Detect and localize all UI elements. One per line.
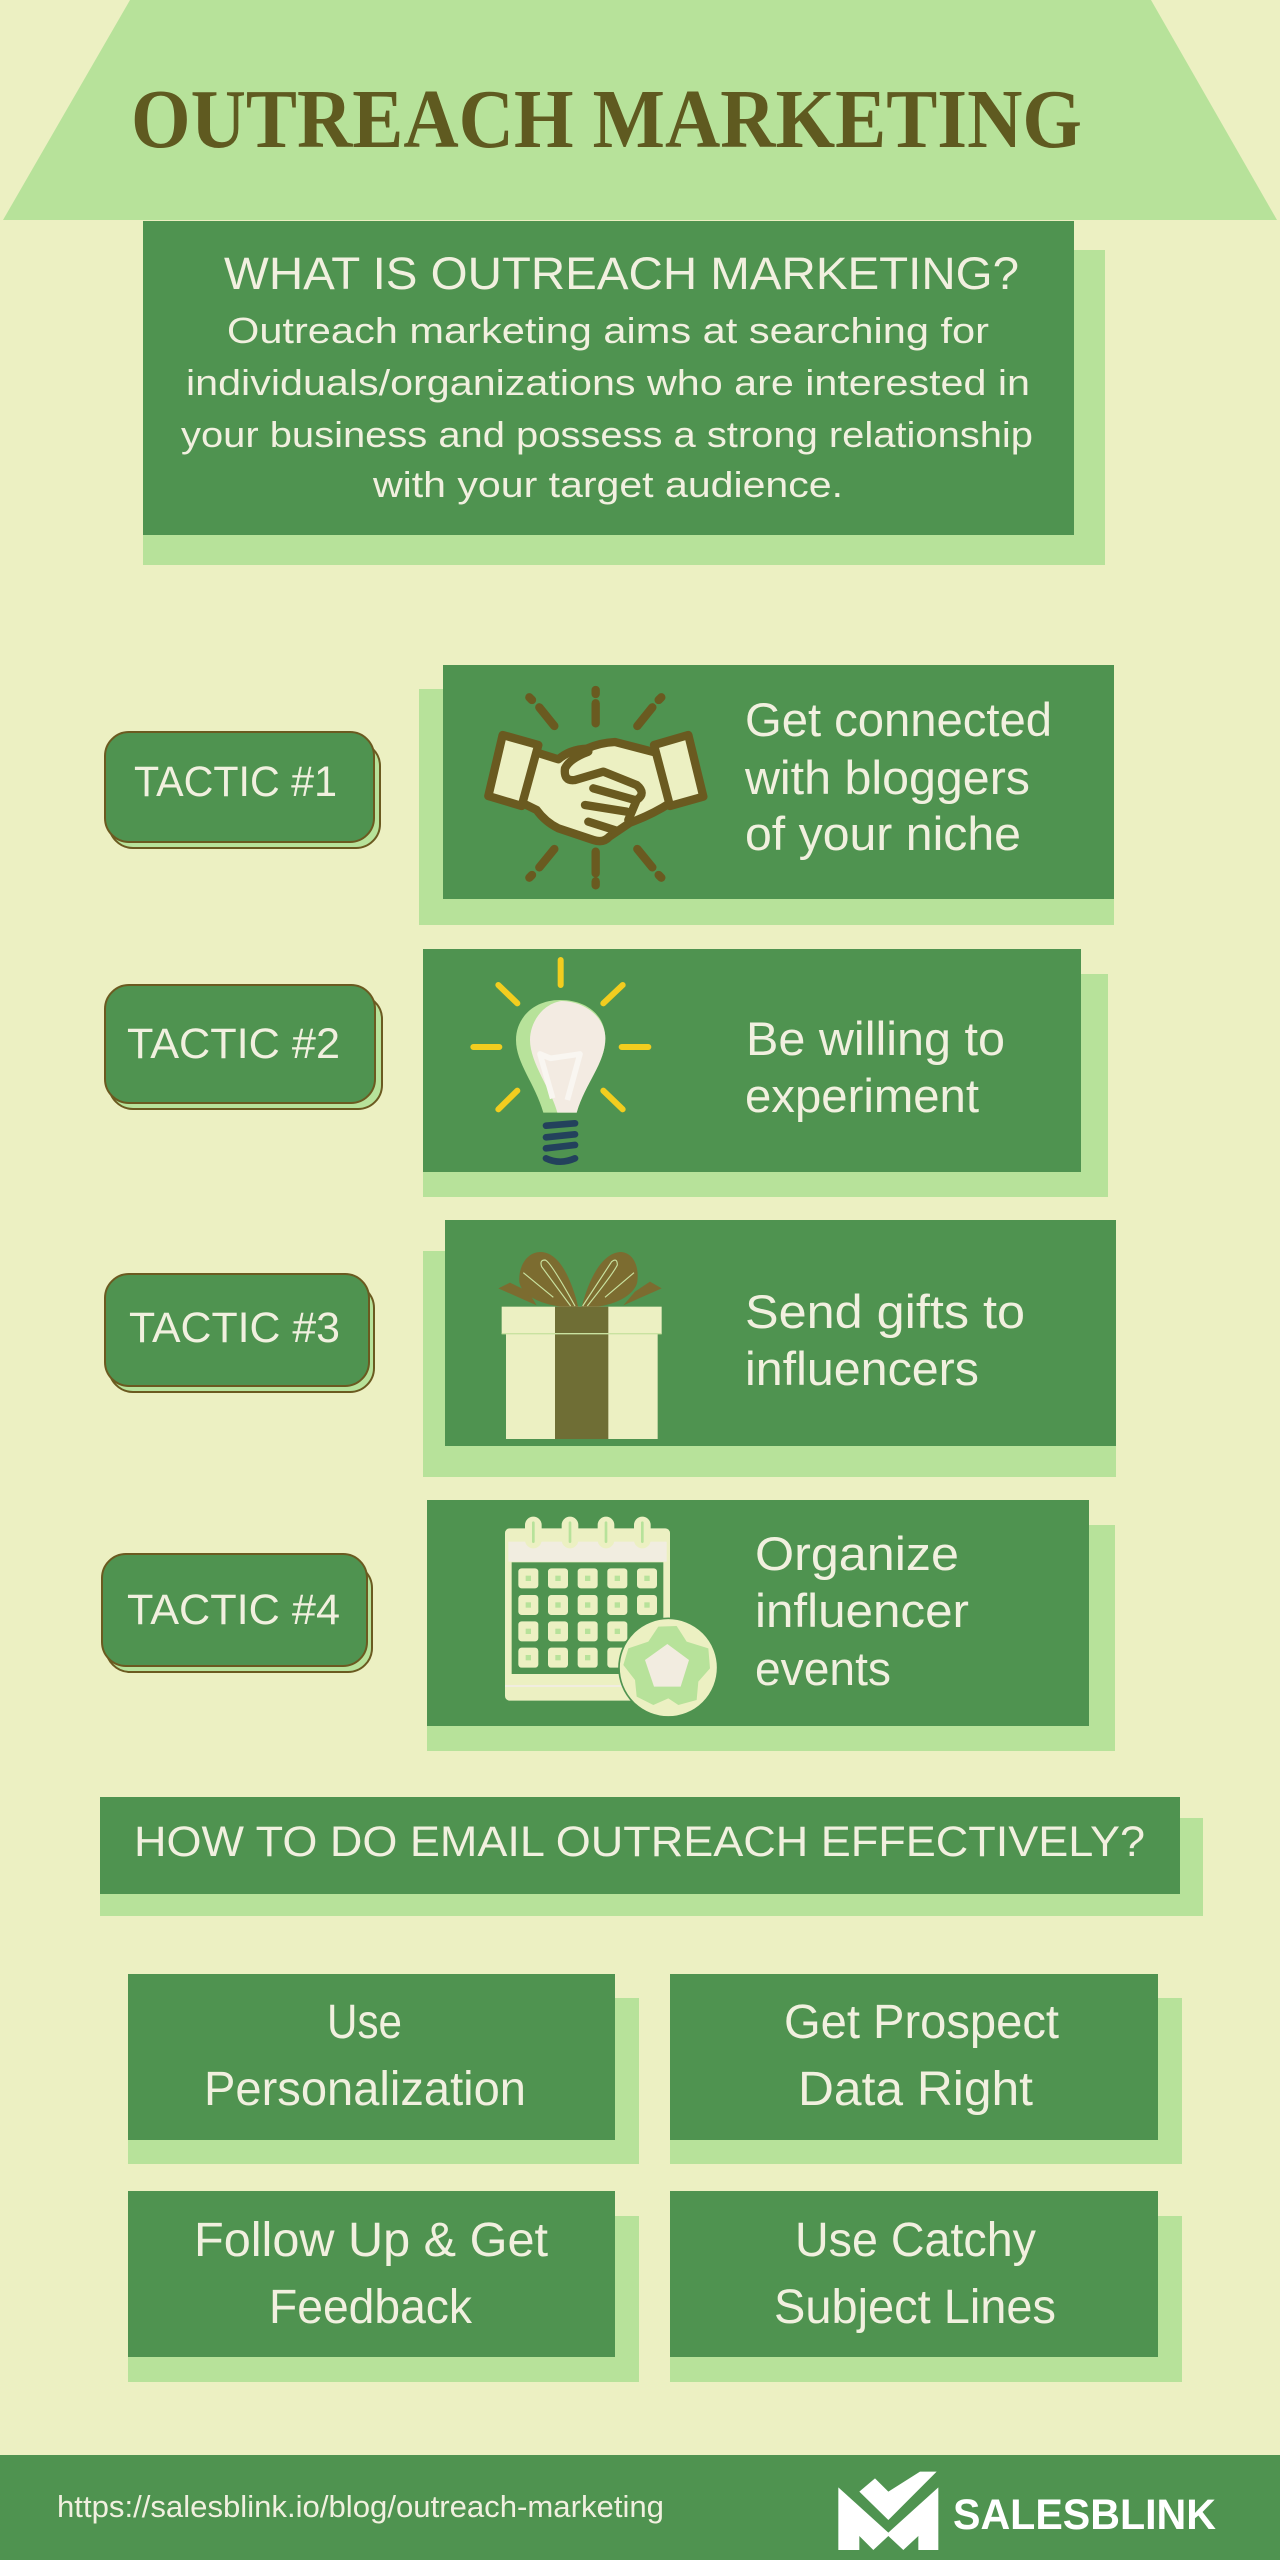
heading: what is outreach marketing: WHAT IS OUTREACH MARKETING? xyxy=(224,248,1019,299)
tactic 2 text xyxy=(745,1012,1005,1122)
card: get prospect data right: Get Prospect xyxy=(784,1996,1059,2049)
tactic 4 text: influencer xyxy=(755,1584,969,1637)
button: tactic 2 xyxy=(105,985,382,1109)
definition text: Outreach marketing aims at searching for xyxy=(227,310,989,351)
button: tactic 1 xyxy=(105,732,380,848)
icon: handshake xyxy=(488,690,703,885)
panel: email outreach heading: HOW TO DO EMAIL OUTREACH EFFECTIVELY? xyxy=(134,1818,1145,1866)
tactic 2 text: experiment xyxy=(745,1069,979,1122)
card: use catchy subject lines xyxy=(670,2191,1182,2382)
button: tactic 2: TACTIC #2 xyxy=(127,1020,340,1068)
icon: calendar and ball xyxy=(505,1517,718,1717)
tactic 1 text: Get connected xyxy=(745,693,1052,746)
panel: tactic 3 xyxy=(423,1220,1116,1477)
card: get prospect data right xyxy=(670,1974,1182,2164)
title banner xyxy=(3,0,1277,220)
definition text xyxy=(181,310,1033,505)
icon: gift box xyxy=(498,1252,662,1439)
panel: tactic 4 xyxy=(427,1500,1115,1751)
panel: tactic 2 xyxy=(423,949,1108,1197)
button: tactic 3 xyxy=(105,1274,374,1392)
tactic 4 text xyxy=(755,1527,969,1695)
tactic 3 text: Send gifts to xyxy=(745,1285,1025,1338)
button: tactic 4: TACTIC #4 xyxy=(127,1586,340,1634)
card: use personalization: Use xyxy=(327,1996,402,2049)
footer bar xyxy=(0,2455,1280,2560)
button: tactic 3: TACTIC #3 xyxy=(129,1304,340,1352)
definition text: individuals/organizations who are interested in xyxy=(186,362,1030,403)
card: use catchy subject lines: Subject Lines xyxy=(774,2281,1056,2334)
card: get prospect data right: Data Right xyxy=(798,2063,1033,2116)
tactic 3 text xyxy=(745,1285,1025,1395)
button: tactic 4 xyxy=(102,1554,372,1672)
icon: light bulb xyxy=(473,960,648,1162)
card: use catchy subject lines: Use Catchy xyxy=(795,2214,1036,2267)
card: follow up and get feedback xyxy=(128,2191,639,2382)
definition text: with your target audience. xyxy=(372,464,843,505)
tactic 3 text: influencers xyxy=(745,1342,979,1395)
tactic 4 text: events xyxy=(755,1642,891,1695)
tactic 1 text: with bloggers xyxy=(744,751,1030,804)
card: follow up and get feedback: Follow Up & Get xyxy=(194,2214,548,2267)
tactic 4 text: Organize xyxy=(755,1527,959,1580)
tactic 1 text xyxy=(744,693,1052,860)
title: OUTREACH MARKETING xyxy=(131,73,1082,166)
panel: tactic 1 xyxy=(419,665,1114,925)
card: use personalization xyxy=(128,1974,639,2164)
tactic 1 text: of your niche xyxy=(745,807,1021,860)
button: tactic 1: TACTIC #1 xyxy=(134,758,337,806)
icon: salesblink logo xyxy=(838,2472,938,2550)
card: use personalization: Personalization xyxy=(204,2063,526,2116)
definition text: your business and possess a strong relationship xyxy=(181,414,1033,455)
panel: what is outreach marketing xyxy=(143,221,1105,565)
source url: https://salesblink.io/blog/outreach-marketing xyxy=(57,2489,664,2524)
brand name: SALESBLINK xyxy=(953,2491,1216,2539)
card: follow up and get feedback: Feedback xyxy=(269,2281,473,2334)
tactic 2 text: Be willing to xyxy=(746,1012,1005,1065)
panel: email outreach heading xyxy=(100,1797,1203,1916)
